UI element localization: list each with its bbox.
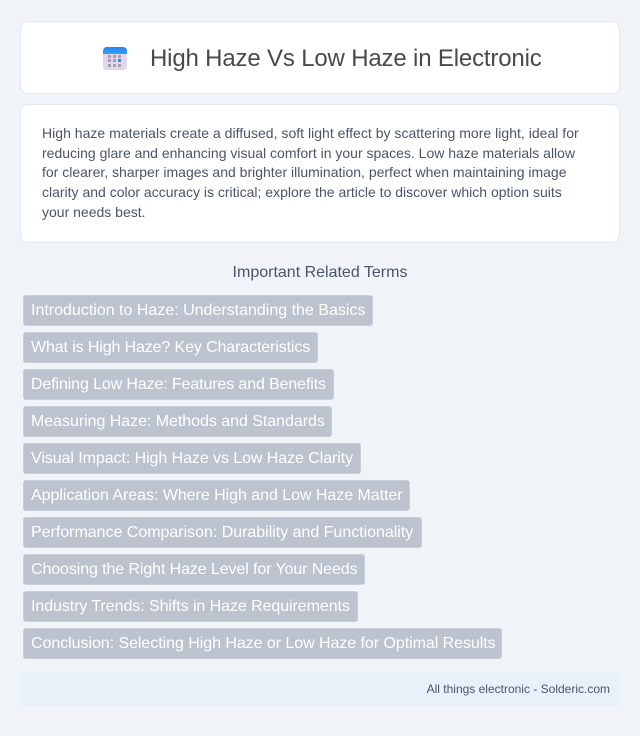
text block: intro paragraph bbox=[42, 125, 579, 220]
text block: intro paragraph: High haze materials create a diffused, soft light effect by scattering more light, ideal for bbox=[42, 125, 579, 141]
title: High Haze Vs Low Haze in Electronic bbox=[150, 45, 542, 72]
text block: intro paragraph: for clearer, sharper images and brighter illumination, perfect when maintaining image bbox=[42, 164, 566, 180]
heading: important related terms: Important Related Terms bbox=[233, 264, 407, 281]
tag 2: What is High Haze? Key Characteristics bbox=[31, 339, 310, 356]
panel: title card bbox=[20, 21, 620, 94]
tag 7 bbox=[23, 517, 422, 548]
footer bar bbox=[20, 672, 620, 706]
text block: intro paragraph: your needs best. bbox=[42, 204, 146, 220]
tag 5: Visual Impact: High Haze vs Low Haze Clarity bbox=[31, 450, 353, 467]
tag 10: Conclusion: Selecting High Haze or Low Haze for Optimal Results bbox=[31, 635, 496, 652]
tag 4 bbox=[23, 406, 332, 437]
tag 4: Measuring Haze: Methods and Standards bbox=[31, 413, 325, 430]
list: related term tags bbox=[23, 295, 502, 659]
tag 6 bbox=[23, 480, 410, 511]
tag 3: Defining Low Haze: Features and Benefits bbox=[31, 376, 326, 393]
tag 9: Industry Trends: Shifts in Haze Requirements bbox=[31, 598, 350, 615]
tag 1: Introduction to Haze: Understanding the Basics bbox=[31, 302, 365, 319]
tag 6: Application Areas: Where High and Low Haze Matter bbox=[31, 487, 403, 504]
tag 8 bbox=[23, 554, 365, 585]
text block: intro paragraph: reducing glare and enhancing visual comfort in your spaces. Low haze materials allow bbox=[42, 145, 575, 161]
panel: intro card bbox=[20, 104, 620, 243]
tag 9 bbox=[23, 591, 358, 622]
tag 1 bbox=[23, 295, 373, 326]
tag 10 bbox=[23, 628, 502, 659]
tag 2 bbox=[23, 332, 318, 363]
tag 7: Performance Comparison: Durability and Functionality bbox=[31, 524, 413, 541]
tag 3 bbox=[23, 369, 334, 400]
tag 8: Choosing the Right Haze Level for Your Needs bbox=[31, 561, 357, 578]
footer text: All things electronic - Solderic.com bbox=[427, 682, 610, 696]
icon: calendar bbox=[103, 47, 127, 70]
text block: intro paragraph: clarity and color accuracy is critical; explore the article to discover which option suits bbox=[42, 184, 562, 200]
tag 5 bbox=[23, 443, 361, 474]
